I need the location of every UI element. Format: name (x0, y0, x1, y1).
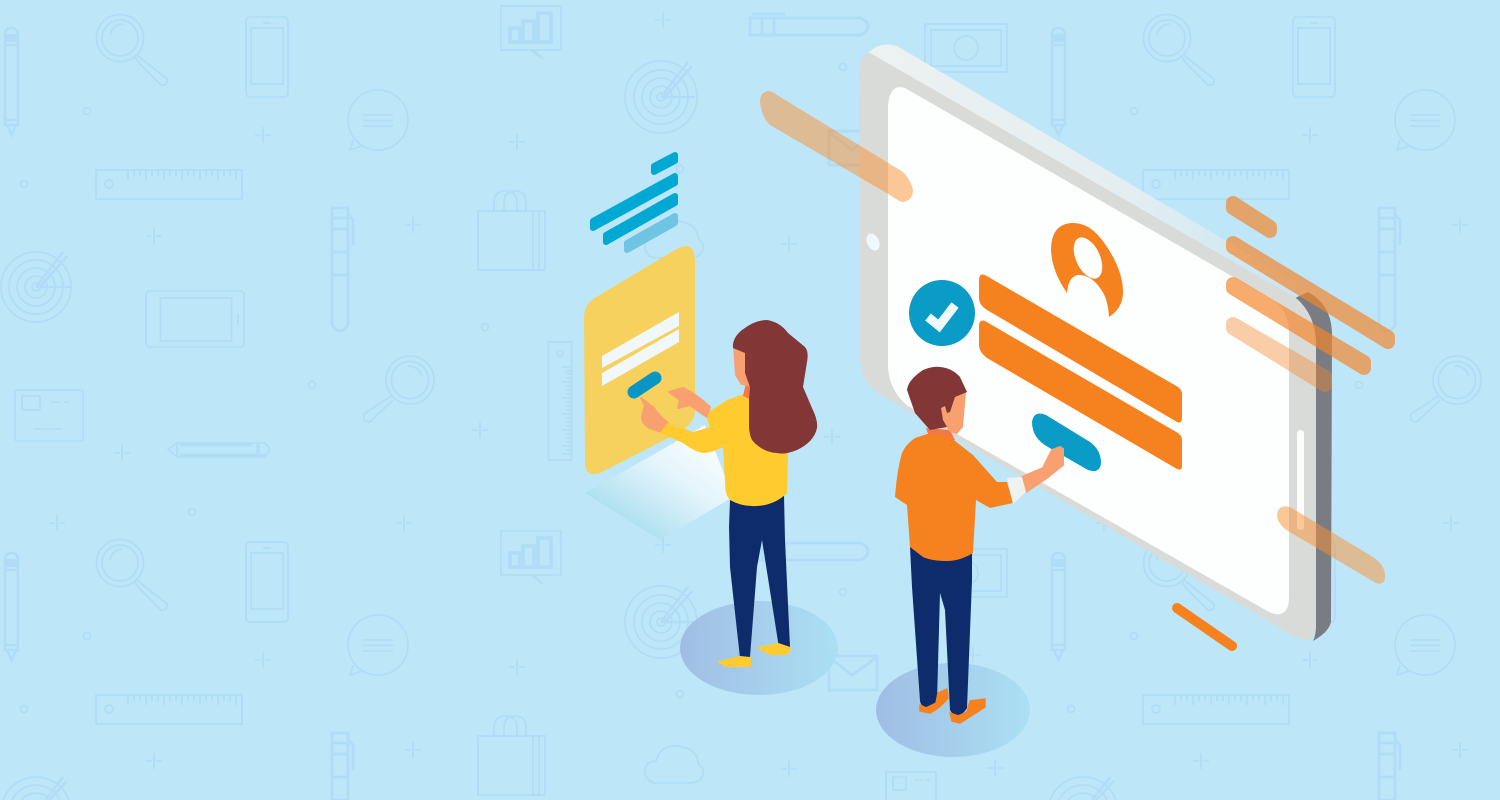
orange strip: solid bottom (1177, 608, 1232, 646)
tablet side edge (1295, 292, 1332, 641)
blue text lines (593, 155, 675, 250)
orange strip: lower right (1277, 506, 1385, 584)
orange strip: right two (1233, 243, 1388, 342)
orange strip: right one (1233, 203, 1270, 231)
floor shadow: woman (680, 601, 838, 695)
form input one (602, 312, 679, 368)
woman hand on form (641, 398, 668, 433)
man hand (1022, 447, 1063, 492)
light beam below form (585, 425, 733, 540)
man face (940, 390, 966, 434)
man sweater (895, 434, 1013, 561)
man collar (926, 428, 955, 440)
orange strip: right four (1233, 324, 1325, 385)
woman hair (733, 320, 817, 454)
man cuff (1007, 477, 1026, 504)
woman (641, 320, 817, 666)
form card (584, 246, 695, 474)
tablet screen (888, 87, 1289, 614)
orange strip: right three (1233, 284, 1364, 368)
man trousers (910, 547, 972, 715)
profile icon (1051, 223, 1123, 317)
large tablet (859, 45, 1332, 641)
form button (634, 378, 655, 392)
tablet top face (868, 45, 1310, 298)
woman hand raised (669, 388, 710, 417)
woman trousers (729, 495, 790, 658)
tablet camera (864, 231, 882, 253)
woman neck (743, 383, 752, 400)
orange strip: top left (760, 91, 913, 202)
form field two (979, 321, 1182, 470)
tablet side button (1297, 430, 1304, 530)
yellow login form (584, 246, 695, 474)
submit button (1032, 414, 1101, 471)
tablet body (859, 53, 1316, 640)
man (895, 367, 1063, 723)
check badge (909, 280, 975, 346)
floor shadow: man (876, 663, 1030, 757)
man shoes (920, 689, 985, 723)
man hair (907, 367, 967, 430)
woman sweater (660, 392, 788, 506)
woman shoes (719, 644, 790, 666)
woman face (733, 345, 750, 386)
form input two (602, 329, 679, 386)
form field one (979, 275, 1182, 422)
